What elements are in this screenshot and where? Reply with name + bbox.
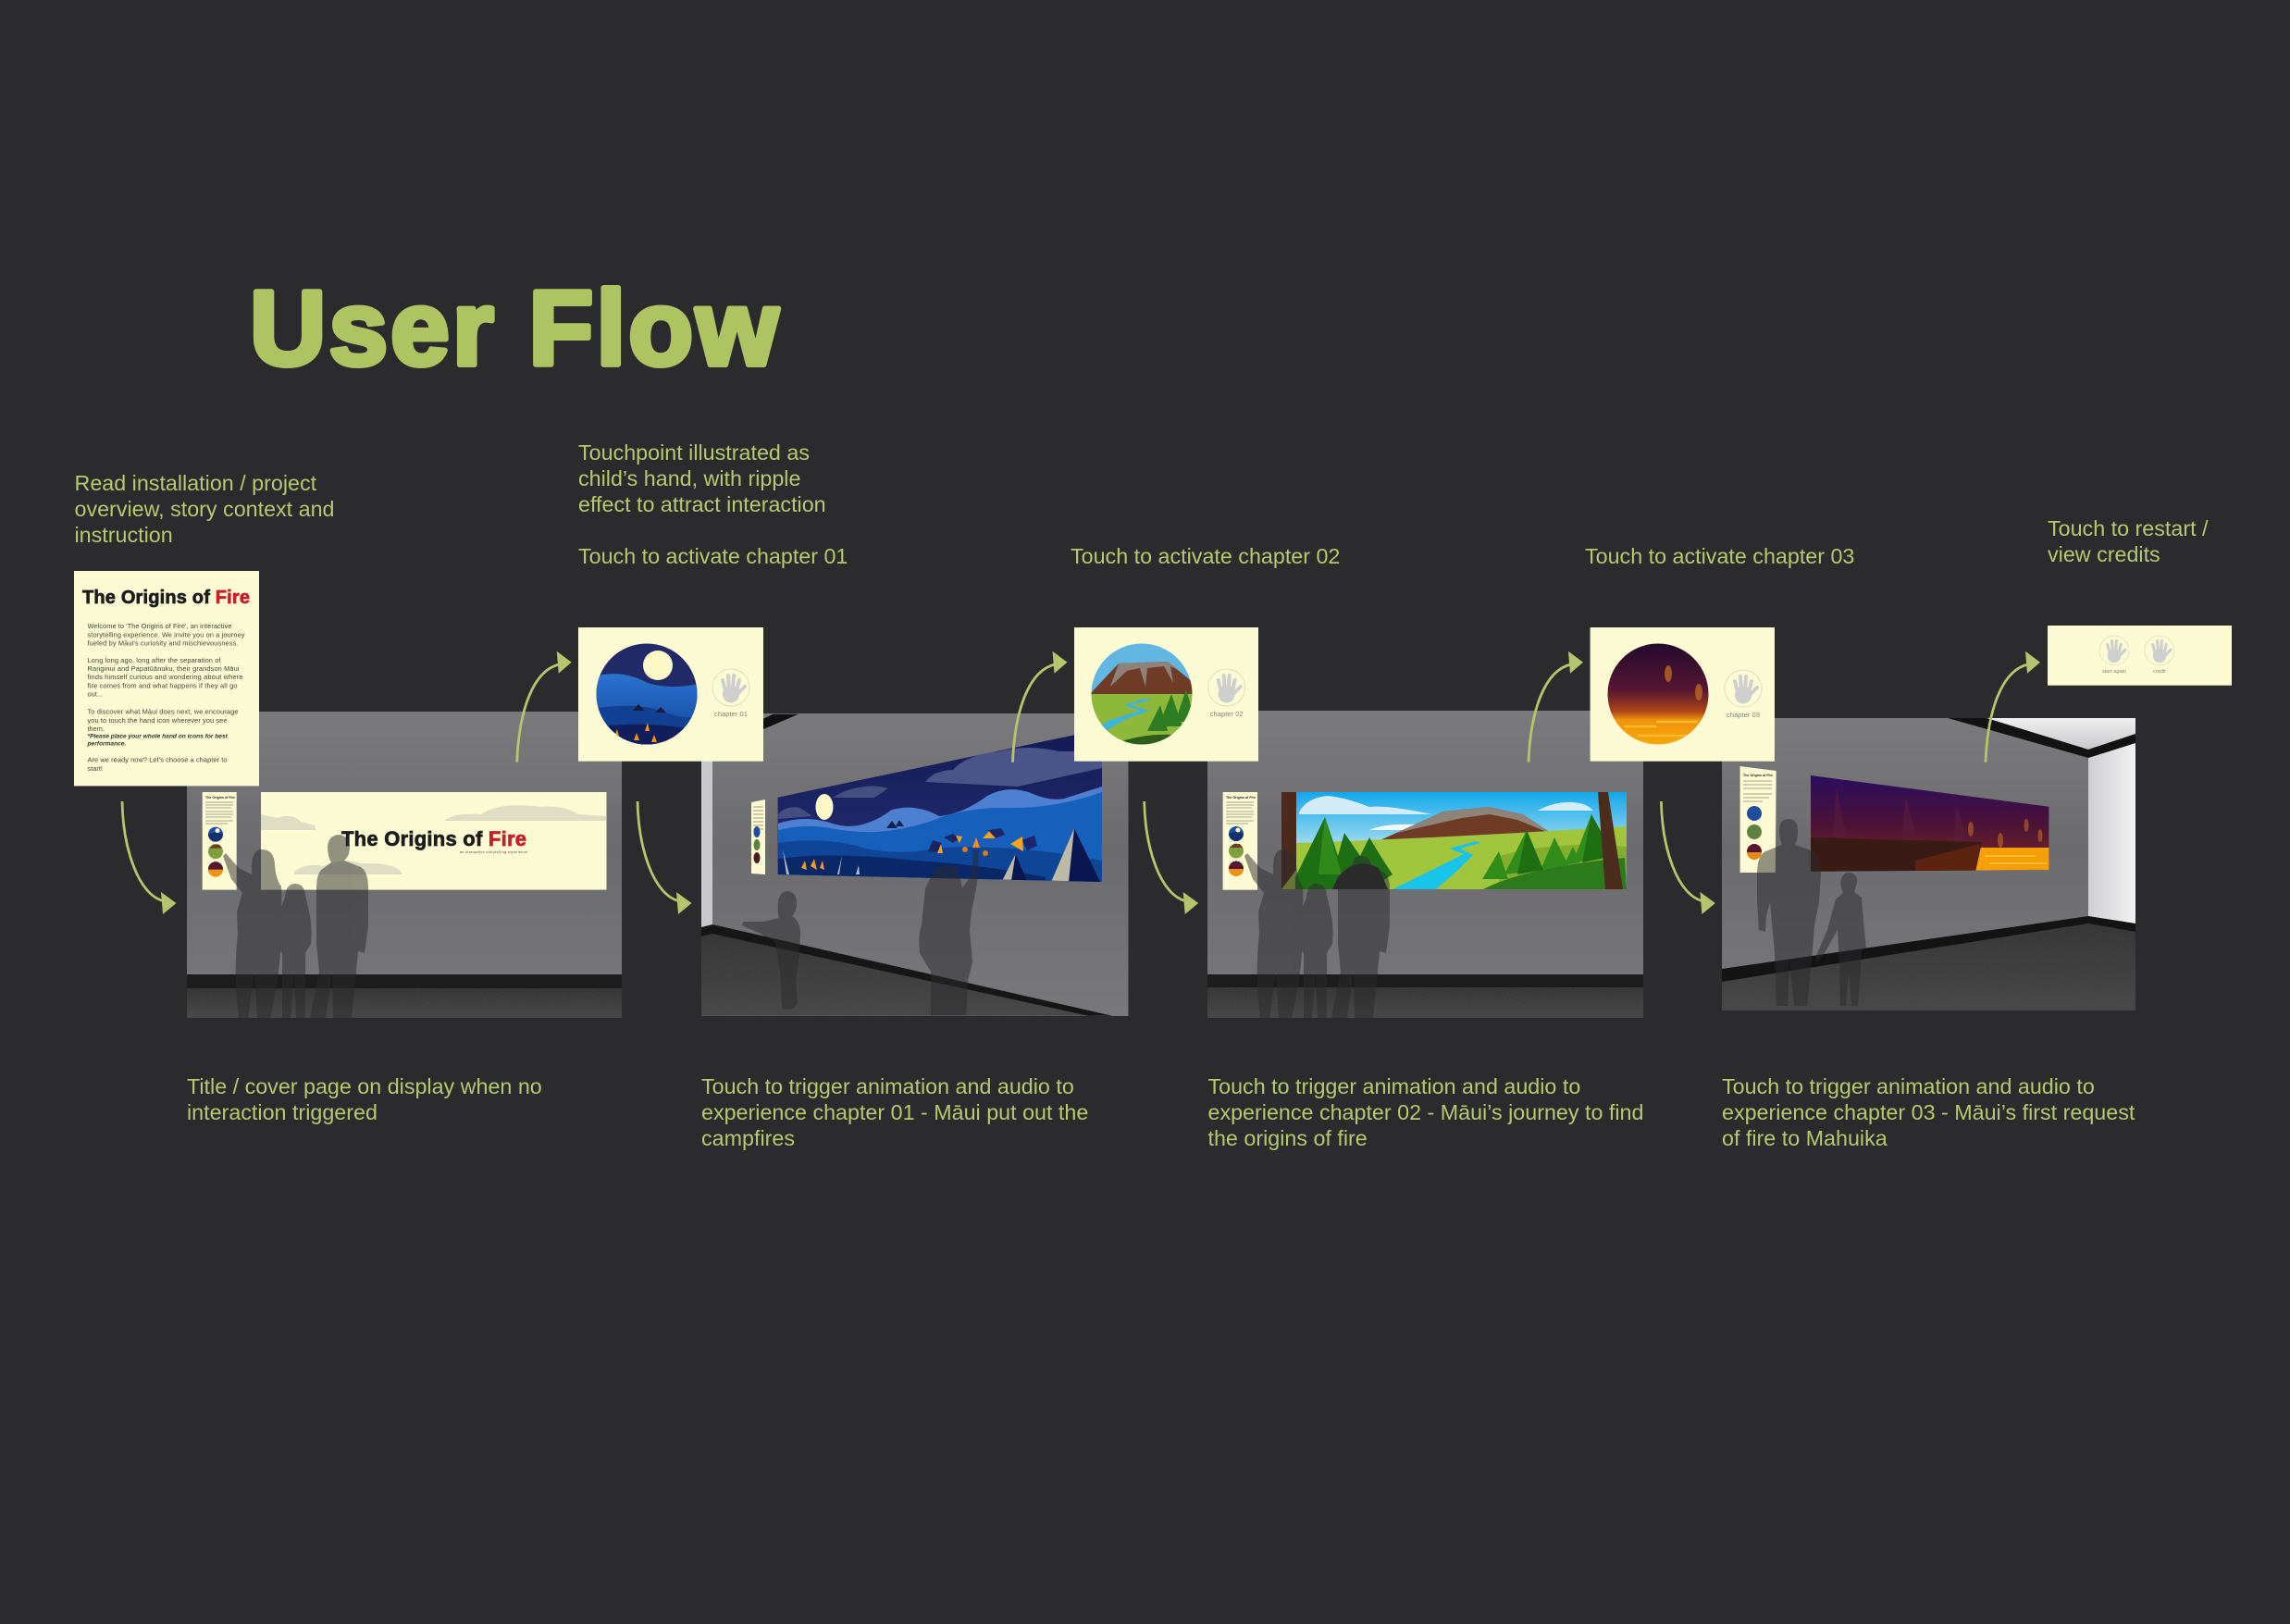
panel: room 3 chapter 03	[1722, 718, 2135, 1010]
icon: start again hand	[2099, 636, 2129, 665]
arrow: chapter 01 touch to room	[637, 801, 692, 914]
icon: credit hand	[2145, 636, 2174, 665]
label: credit: credit	[2153, 669, 2166, 675]
panel: room 1 chapter 01	[701, 713, 1129, 1016]
text: overview note: Read installation / project	[74, 471, 317, 495]
poster body text: *Please place your whole hand on icons for best	[87, 733, 229, 740]
text: chapter 02 caption: the origins of fire	[1208, 1126, 1368, 1150]
arrow: room 3 up to restart card	[1986, 651, 2040, 762]
poster body text: out...	[87, 690, 103, 699]
mini poster	[203, 792, 237, 890]
text: touchpoint note: child’s hand, with ripple	[578, 466, 800, 490]
poster body text: performance.	[87, 740, 126, 748]
icon: night circle	[596, 644, 698, 744]
mini poster	[1740, 766, 1776, 873]
silhouette: man	[1757, 819, 1821, 1006]
panel: touch card chapter 02	[1074, 627, 1258, 762]
icon: valley circle	[1092, 644, 1192, 744]
silhouette: family	[223, 835, 368, 1018]
text: cover caption: interaction triggered	[187, 1100, 378, 1124]
artwork: night hills	[777, 726, 1103, 884]
poster body text: them.	[87, 725, 105, 733]
arrow: chapter 02 touch to room	[1145, 801, 1198, 914]
label: chapter 02	[1210, 710, 1244, 718]
panel: overview poster card	[74, 571, 259, 786]
text: cover caption: Title / cover page on display when no	[187, 1074, 542, 1098]
text: chapter 02 caption: Touch to trigger animation and audio to	[1208, 1074, 1580, 1098]
silhouette: family	[1244, 849, 1390, 1018]
icon: hand touchpoint	[1208, 669, 1245, 706]
poster body text: fueled by Māui's curiosity and mischievousness.	[87, 638, 239, 648]
poster body text: finds himself curious and wondering about where	[87, 673, 242, 681]
icon: hand touchpoint	[712, 669, 749, 706]
poster body text: storytelling experience. We invite you on a journey	[87, 631, 245, 639]
poster body text: Welcome to 'The Origins of Fire', an interactive	[87, 622, 231, 630]
panel: touch card chapter 01	[578, 627, 763, 762]
poster body text: Ranginui and Papatūānuku, their grandson Māui	[87, 664, 240, 673]
poster body text: you to touch the hand icon wherever you see	[87, 716, 228, 725]
arrow: cover up to chapter 01 card	[517, 651, 572, 762]
icon: lava circle	[1605, 643, 1712, 747]
arrow: room 2 up to chapter 03 card	[1529, 651, 1583, 762]
mini poster	[1223, 792, 1257, 890]
text: chapter 03 caption: of fire to Mahuika	[1722, 1126, 1888, 1150]
text: restart note: view credits	[2048, 542, 2160, 566]
mini poster: The Origins of Fire	[1226, 796, 1256, 800]
text: activate chapter 03: Touch to activate chapter 03	[1585, 544, 1854, 568]
banner artwork: The Origins of Fire	[341, 827, 526, 850]
text: chapter 03 caption: experience chapter 03 - Māui’s first request	[1722, 1100, 2135, 1124]
text: chapter 01 caption: experience chapter 01 - Māui put out the	[701, 1100, 1088, 1124]
artwork: valley	[1281, 792, 1627, 889]
artwork: lava cave	[1811, 775, 2049, 872]
text: overview note: instruction	[74, 523, 173, 547]
banner artwork	[261, 792, 607, 890]
panel: room 2 chapter 02	[1207, 711, 1643, 1018]
text: touchpoint note: Touch to activate chapter 01	[578, 544, 848, 568]
mini poster	[751, 800, 765, 874]
text: activate chapter 02: Touch to activate chapter 02	[1071, 544, 1340, 568]
panel: restart and credits card	[2048, 626, 2232, 686]
icon: hand touchpoint	[1725, 670, 1762, 707]
panel: touch card chapter 03	[1591, 627, 1775, 762]
silhouette: child	[1815, 873, 1866, 1006]
text: chapter 03 caption: Touch to trigger animation and audio to	[1722, 1074, 2095, 1098]
arrow: room 1 up to chapter 02 card	[1012, 651, 1068, 762]
mini poster: The Origins of Fire	[1743, 774, 1773, 777]
text: overview note: overview, story context and	[74, 497, 335, 521]
label: chapter 03	[1727, 711, 1760, 719]
silhouette: adult reaching	[919, 849, 979, 1015]
text: chapter 02 caption: experience chapter 02 - Māui’s journey to find	[1208, 1100, 1643, 1124]
text: chapter 01 caption: Touch to trigger animation and audio to	[701, 1074, 1074, 1098]
arrow: overview to cover	[122, 801, 176, 914]
poster heading: The Origins of Fire	[82, 588, 250, 608]
poster body text: To discover what Māui does next, we encourage	[87, 707, 239, 715]
poster body text: Long long ago, long after the separation of	[87, 656, 221, 664]
text: restart note: Touch to restart /	[2048, 516, 2209, 540]
panel: room 0 title cover	[187, 712, 622, 1018]
text: touchpoint note: Touchpoint illustrated as	[578, 440, 810, 465]
poster body text: Are we ready now? Let's choose a chapter to	[87, 756, 228, 764]
label: start again: start again	[2102, 669, 2126, 675]
text: chapter 01 caption: campfires	[701, 1126, 795, 1150]
text: touchpoint note: effect to attract interaction	[578, 492, 826, 516]
mini poster: The Origins of Fire	[205, 796, 235, 800]
title: User Flow	[250, 270, 778, 388]
silhouette: child pointing	[742, 891, 800, 1010]
poster body text: start!	[87, 764, 103, 773]
banner artwork: an interactive storytelling experience	[460, 850, 527, 854]
arrow: chapter 03 touch to room	[1661, 801, 1715, 914]
poster body text: fire comes from and what happens if they all go	[87, 682, 237, 690]
poster body text	[87, 622, 245, 773]
label: chapter 01	[714, 710, 748, 718]
